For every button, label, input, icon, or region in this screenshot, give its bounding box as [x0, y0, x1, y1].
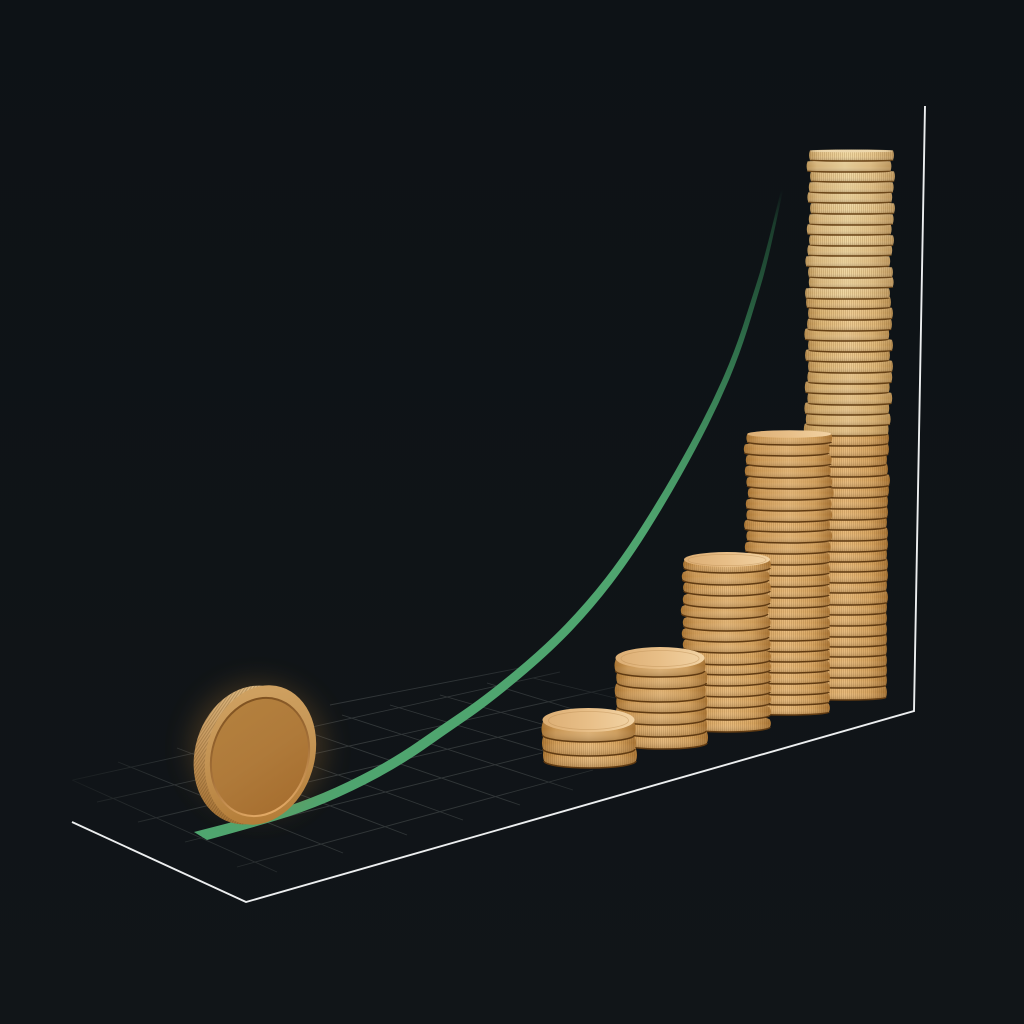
coin glow [190, 682, 326, 814]
coin stack: third [744, 430, 834, 715]
coin stack: tallest [802, 150, 895, 700]
top face: tallest stack [810, 150, 892, 152]
coin face [197, 686, 323, 828]
coin stack: first small [614, 647, 708, 749]
top face: second stack [684, 552, 770, 567]
top face: first small stack [616, 647, 704, 669]
coin stack: second [681, 552, 771, 732]
top face: third stack [747, 430, 831, 438]
coin stack: shortest [542, 708, 637, 768]
coin front rim [188, 671, 333, 839]
rolling coin [177, 671, 333, 839]
axes [72, 106, 925, 902]
top face: shortest stack [542, 708, 634, 732]
growth curve [194, 190, 783, 840]
coin edge [177, 671, 325, 839]
floor grid [72, 668, 615, 872]
